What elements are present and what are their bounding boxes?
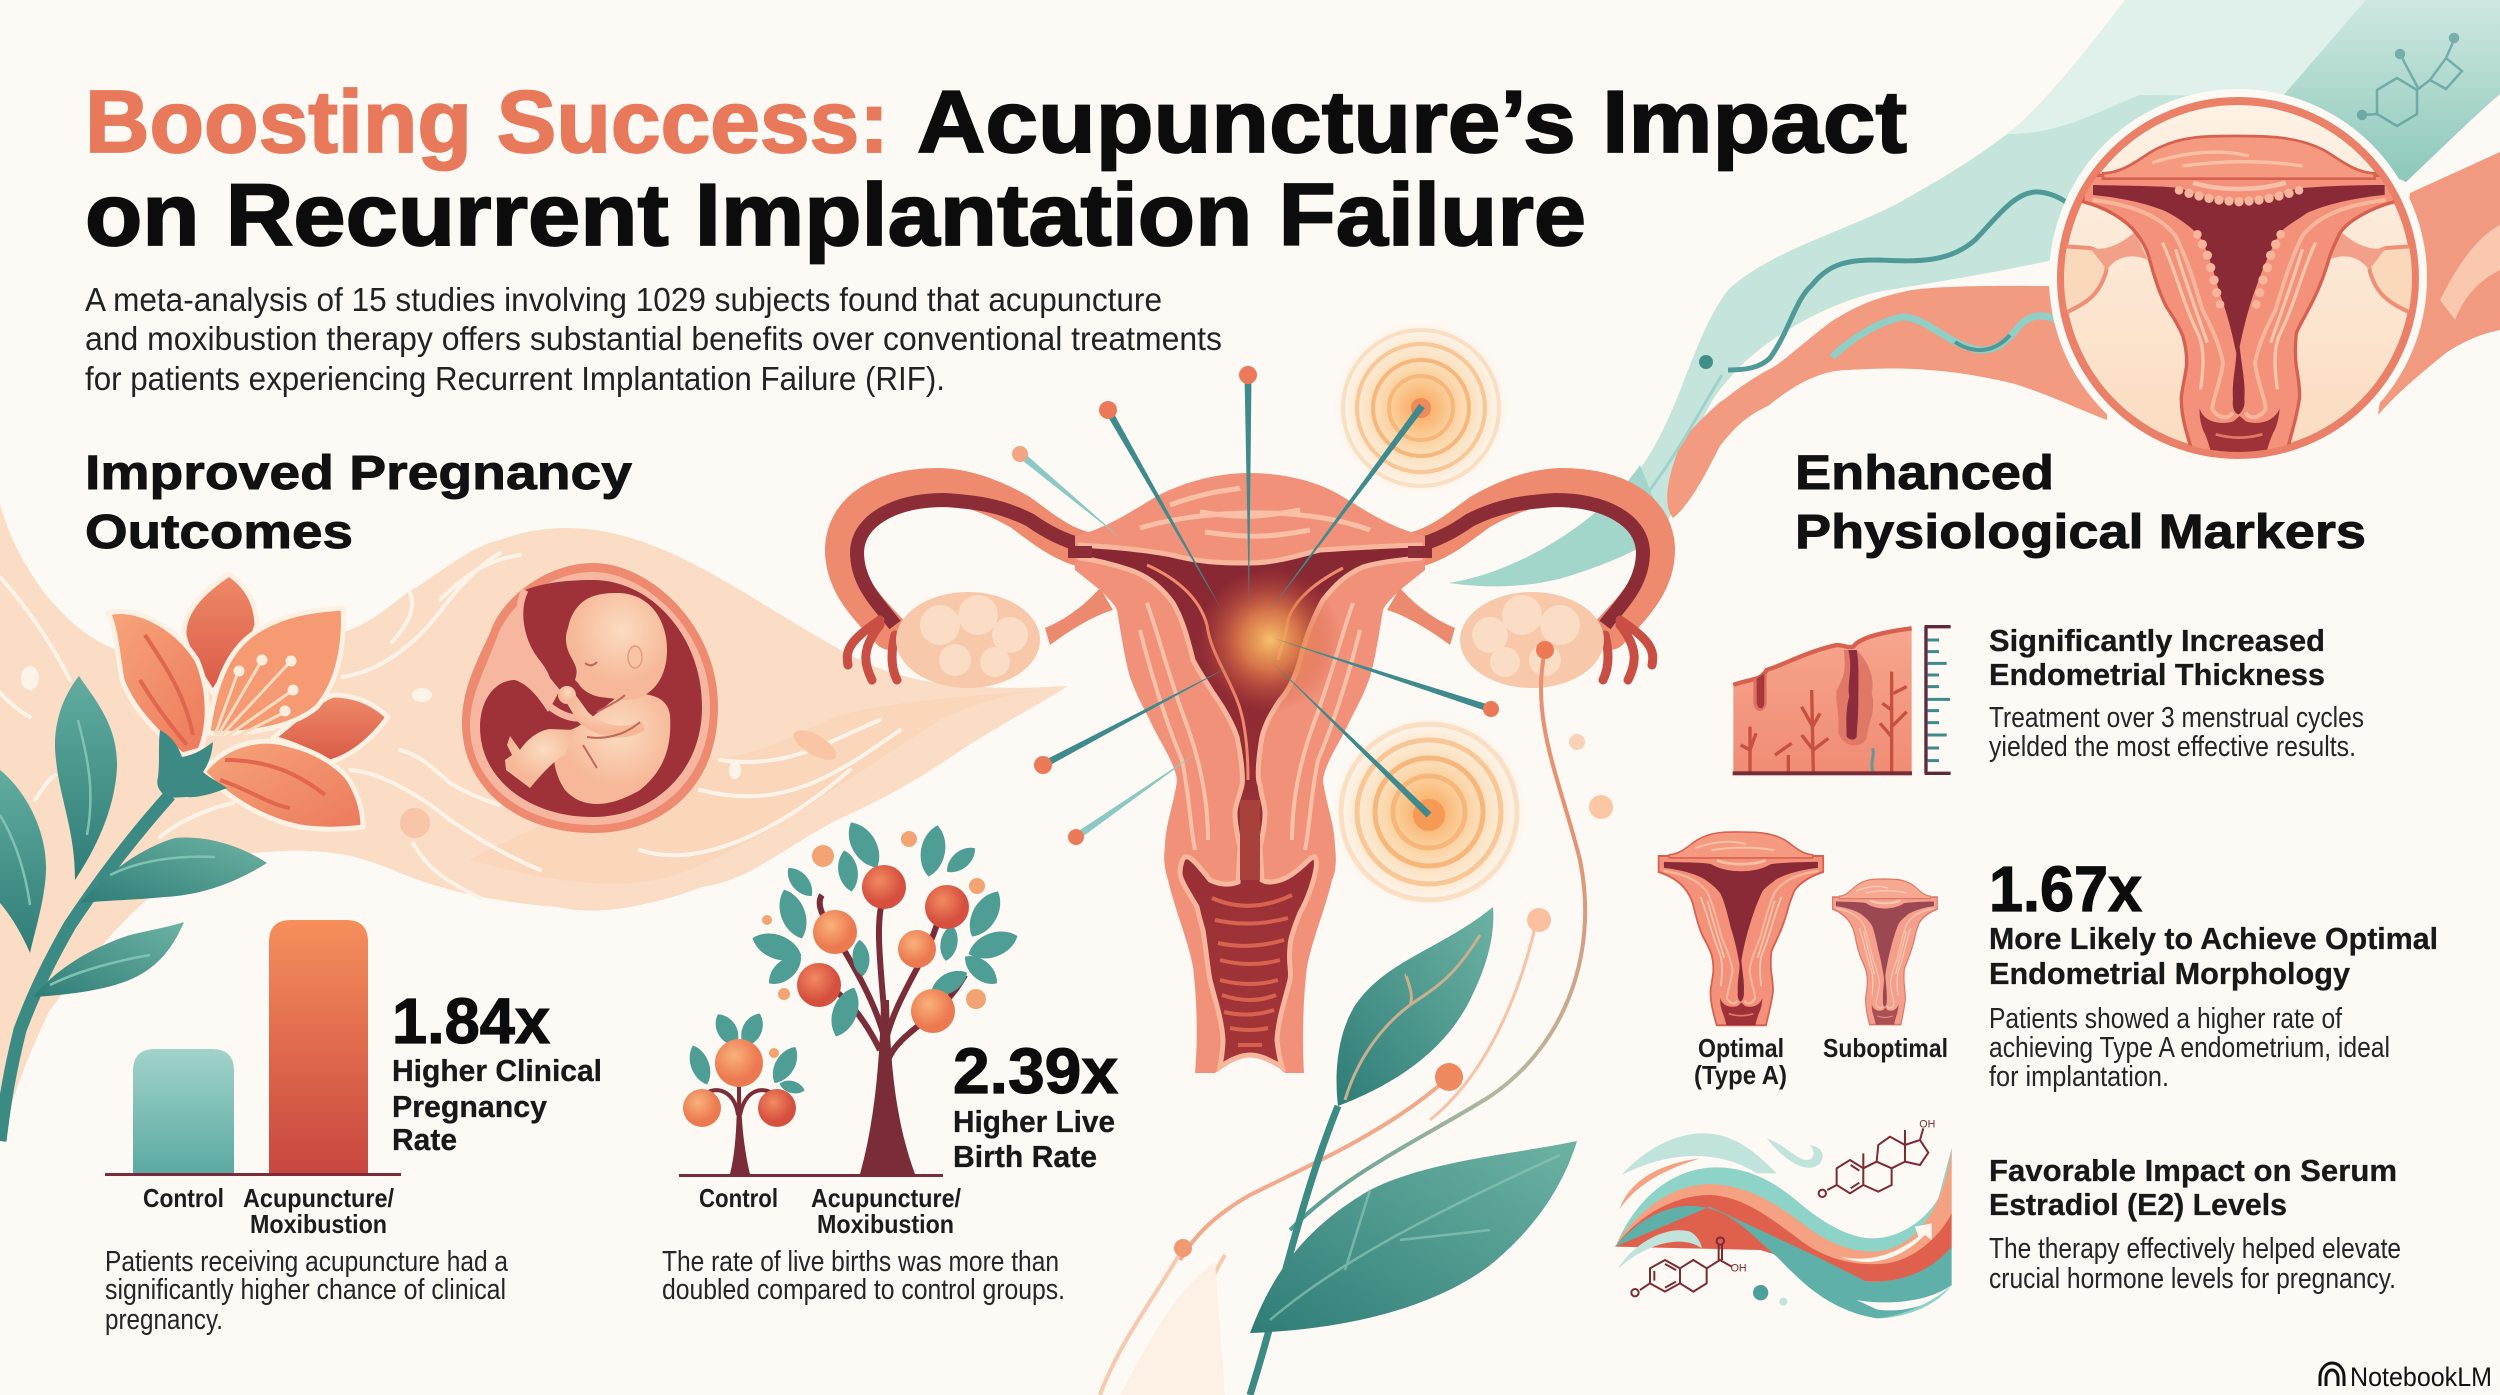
item heading: Favorable Impact on Serum <box>1989 1153 2397 1188</box>
panel: endometrial morphology <box>1659 832 2438 1093</box>
tree labels: Moxibustion <box>817 1209 954 1239</box>
section heading: improved pregnancy outcomes <box>85 447 632 559</box>
description <box>662 1246 1065 1306</box>
stat: 1.67x: 1.67x <box>1989 853 2142 925</box>
intro text <box>85 281 1222 397</box>
panel: endometrial thickness <box>1733 623 2364 775</box>
stat label: Higher Live <box>953 1104 1115 1139</box>
main illustration: uterus with acupuncture needles <box>843 320 1657 1073</box>
icon: small tree <box>679 1009 943 1177</box>
description: pregnancy. <box>105 1304 223 1336</box>
section heading: enhanced physiological markers <box>1795 447 2366 559</box>
uterus: right tube and ovary <box>1350 486 1657 688</box>
title <box>85 72 1907 264</box>
description: The rate of live births was more than <box>662 1246 1059 1278</box>
morphology labels: (Type A) <box>1694 1060 1787 1090</box>
uterus: central canal shading <box>1240 800 1260 880</box>
stat label: Birth Rate <box>953 1139 1097 1174</box>
stat label: Higher Clinical <box>392 1053 602 1088</box>
title: on Recurrent Implantation Failure <box>85 165 1586 264</box>
title: Boosting Success: <box>85 72 889 171</box>
description: doubled compared to control groups. <box>662 1274 1065 1306</box>
item heading: Significantly Increased <box>1989 623 2325 658</box>
uterus: tube to cavity joins <box>1068 546 1432 558</box>
icon: heat rings lower <box>1331 714 1527 910</box>
tree labels: Acupuncture/ <box>811 1183 961 1213</box>
section heading: improved pregnancy outcomes: Improved Pregnancy <box>85 447 632 500</box>
item description <box>1989 702 2364 763</box>
stat label: Pregnancy <box>392 1089 548 1124</box>
illustration: circled uterus detail <box>2049 89 2427 467</box>
icon: hormone waves with molecules: OH <box>1919 1118 1935 1130</box>
morphology labels <box>1694 1033 1948 1090</box>
icon: optimal uterus <box>1659 832 1823 1025</box>
bar chart: Acupuncture/ <box>243 1183 394 1213</box>
background flow: peach stream <box>0 504 1068 1141</box>
description: Patients receiving acupuncture had a <box>105 1246 509 1278</box>
intro text: and moxibustion therapy offers substantial benefits over conventional treatments <box>85 320 1222 357</box>
background wave: right teal and salmon <box>1449 0 2500 586</box>
icon: heat rings upper <box>1333 320 1509 496</box>
panel: serum estradiol <box>1615 1118 2401 1318</box>
item heading: Endometrial Thickness <box>1989 657 2325 692</box>
stat: 1.84x: 1.84x <box>392 985 550 1057</box>
morphology labels: Suboptimal <box>1823 1033 1948 1063</box>
section heading: enhanced physiological markers: Physiological Markers <box>1795 506 2366 559</box>
description: achieving Type A endometrium, ideal <box>1989 1032 2390 1064</box>
stat label: Rate <box>392 1122 457 1157</box>
item heading <box>1989 1153 2397 1222</box>
needles <box>1012 366 1499 845</box>
uterus: dome highlights <box>1140 488 1370 536</box>
leaf: upper <box>1337 907 1493 1106</box>
item description: yielded the most effective results. <box>1989 731 2356 763</box>
tree labels: Control <box>699 1183 778 1213</box>
item heading <box>1989 623 2325 692</box>
icon: hormone waves with molecules: OH <box>1731 1263 1747 1275</box>
item description: crucial hormone levels for pregnancy. <box>1989 1263 2396 1295</box>
description: Patients showed a higher rate of <box>1989 1003 2343 1035</box>
logo: NotebookLM: NotebookLM <box>2350 1362 2492 1392</box>
uterus: cavity <box>1080 545 1420 1067</box>
stat label: Endometrial Morphology <box>1989 956 2351 991</box>
section heading: enhanced physiological markers: Enhanced <box>1795 447 2054 500</box>
intro text: for patients experiencing Recurrent Implantation Failure (RIF). <box>85 360 945 397</box>
stat: 2.39x: 2.39x <box>953 1035 1118 1107</box>
item heading: Estradiol (E2) Levels <box>1989 1187 2287 1222</box>
bar chart: Control <box>143 1183 224 1213</box>
glow: treatment focus <box>1198 568 1342 712</box>
panel: live birth <box>662 816 1118 1306</box>
stat label <box>1989 921 2438 991</box>
stat label: More Likely to Achieve Optimal <box>1989 921 2438 956</box>
icon: suboptimal uterus <box>1833 879 1937 1025</box>
icon: hormone waves with molecules <box>1615 1118 1952 1318</box>
bar chart: Moxibustion <box>250 1209 387 1239</box>
description: for implantation. <box>1989 1061 2169 1093</box>
item description <box>1989 1233 2401 1295</box>
icon: large tree <box>748 816 1022 1174</box>
stat label <box>392 1053 602 1157</box>
icon: endometrium cross-section with ruler <box>1733 627 1951 775</box>
item description: The therapy effectively helped elevate <box>1989 1233 2401 1265</box>
icon: top-right molecule <box>2358 34 2462 126</box>
leaf: lower <box>1250 1141 1577 1333</box>
tree labels <box>699 1183 961 1239</box>
uterus: muscle strands <box>1140 603 1360 850</box>
uterus: body <box>1075 473 1425 1073</box>
vine: lines, dots and leaves <box>1100 641 1613 1395</box>
stat label <box>953 1104 1115 1174</box>
bar chart <box>105 920 401 1239</box>
panel: clinical pregnancy <box>105 920 602 1336</box>
description <box>1989 1003 2390 1093</box>
icon: flower with leaves <box>0 574 388 1141</box>
description: significantly higher chance of clinical <box>105 1274 506 1306</box>
uterus: lower canal ridges <box>1212 895 1292 1045</box>
wave: thin teal line <box>1728 192 2070 370</box>
intro text: A meta-analysis of 15 studies involving 1029 subjects found that acupuncture <box>85 281 1162 318</box>
morphology labels: Optimal <box>1698 1033 1784 1063</box>
uterus: cavity highlight lines <box>1147 565 1343 780</box>
section heading: improved pregnancy outcomes: Outcomes <box>85 506 353 559</box>
description <box>105 1246 509 1336</box>
item description: Treatment over 3 menstrual cycles <box>1989 702 2364 734</box>
icon: fetus in womb <box>462 563 718 833</box>
title: Acupuncture’s Impact <box>917 72 1907 171</box>
uterus: left tube and ovary <box>843 486 1150 688</box>
